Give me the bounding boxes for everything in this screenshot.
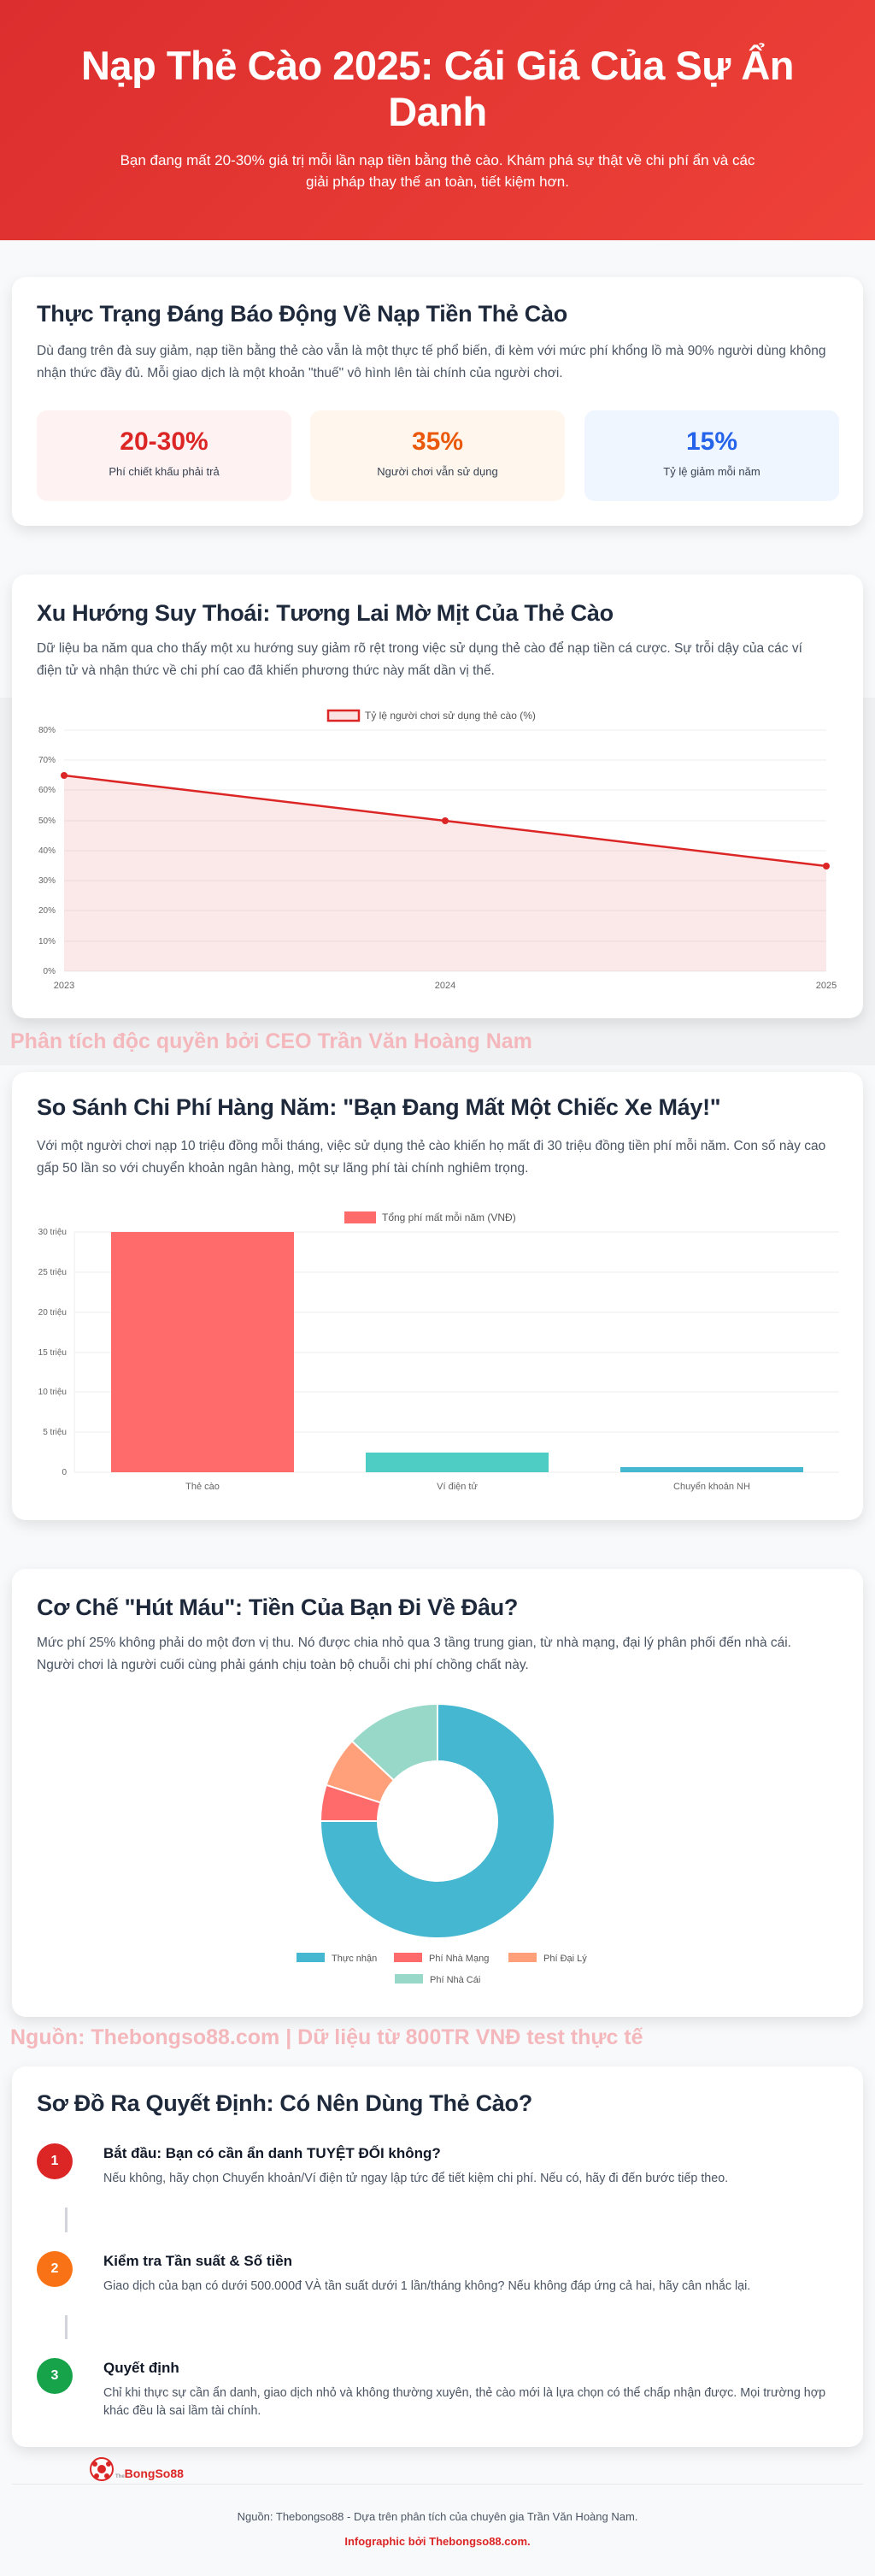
text block: Dù đang trên đà suy giảm, nạp tiền bằng thẻ cào vẫn là một thực tế phổ biến, đi kèm với mức phí khổng lồ mà 90% người dùng không nhận thức đầy đủ. Mỗi giao dịch là một khoản "thuế" vô hình lên tài chính của người chơi. <box>37 344 825 380</box>
panel: trend <box>12 575 863 1018</box>
line chart: 2024 <box>435 981 455 991</box>
heading: Sơ Đồ Ra Quyết Định: Có Nên Dùng Thẻ Cào? <box>37 2090 532 2116</box>
stat: users: Người chơi vẫn sử dụng <box>377 465 498 478</box>
line chart: 70% <box>38 756 56 765</box>
watermark: Phân tích độc quyền bởi CEO Trần Văn Hoàng Nam <box>10 1029 532 1053</box>
stat: users <box>310 410 565 501</box>
bar chart: Ví điện tử <box>437 1482 478 1492</box>
heading: So Sánh Chi Phí Hàng Năm: "Bạn Đang Mất Một Chiếc Xe Máy!" <box>37 1094 720 1120</box>
line chart: 60% <box>38 786 56 795</box>
line chart: 40% <box>38 846 56 856</box>
bar chart: 30 triệu <box>38 1228 67 1237</box>
stat: users: 35% <box>412 427 463 456</box>
legend: Tổng phí mất mỗi năm (VNĐ) <box>382 1211 516 1223</box>
bar chart: 5 triệu <box>43 1428 67 1437</box>
subtitle: Bạn đang mất 20-30% giá trị mỗi lần nạp tiền bằng thẻ cào. Khám phá sự thật về chi phí ẩn và các giải pháp thay thế an toàn, tiết kiệm hơn. <box>120 152 755 190</box>
panel: current situation <box>12 277 863 526</box>
step 1 <box>37 2143 728 2185</box>
background band <box>0 698 875 1065</box>
step 3: Quyết định <box>103 2360 179 2376</box>
stat: fee: Phí chiết khấu phải trả <box>109 465 220 478</box>
panel: annual cost <box>12 1072 863 1520</box>
text block: Mức phí 25% không phải do một đơn vị thu. Nó được chia nhỏ qua 3 tầng trung gian, từ nhà mạng, đại lý phân phối đến nhà cái. Người chơi là người cuối cùng phải gánh chịu toàn bộ chuỗi chi phí chồng chất này. <box>37 1636 791 1672</box>
line chart: 50% <box>38 816 56 826</box>
line chart: 2025 <box>816 981 837 991</box>
line chart: 0% <box>44 967 56 976</box>
step 2: 2 <box>51 2261 58 2276</box>
bar chart <box>38 1211 839 1492</box>
legend: Thực nhận <box>332 1954 377 1964</box>
step 1: Nếu không, hãy chọn Chuyển khoản/Ví điện tử ngay lập tức để tiết kiệm chi phí. Nếu có, hãy đi đến bước tiếp theo. <box>103 2172 728 2185</box>
bar chart: Chuyển khoản NH <box>673 1482 750 1492</box>
step 3: Chỉ khi thực sự cần ẩn danh, giao dịch nhỏ và không thường xuyên, thẻ cào mới là lựa chọn có thể chấp nhận được. Mọi trường hợp khác đều là sai lầm tài chính. <box>103 2386 825 2418</box>
logo: TheBongSo88 <box>115 2467 184 2480</box>
text block: Dữ liệu ba năm qua cho thấy một xu hướng suy giảm rõ rệt trong việc sử dụng thẻ cào để nạp tiền cá cược. Sự trỗi dậy của các ví điện tử và nhận thức về chi phí cao đã khiến phương thức này mất dần vị thế. <box>37 641 802 678</box>
bar chart: 20 triệu <box>38 1308 67 1317</box>
line chart: 30% <box>38 876 56 886</box>
bar chart: Thẻ cào <box>185 1482 220 1492</box>
step 2: Kiểm tra Tần suất & Số tiền <box>103 2253 292 2269</box>
legend: Phí Đại Lý <box>543 1954 587 1964</box>
bar chart: 15 triệu <box>38 1348 67 1358</box>
logo <box>90 2457 184 2481</box>
line chart: 80% <box>38 726 56 735</box>
footer credit: Infographic bởi Thebongso88.com. <box>344 2535 531 2548</box>
stat: decline <box>584 410 839 501</box>
stat: decline: Tỷ lệ giảm mỗi năm <box>663 465 760 478</box>
title: Nạp Thẻ Cào 2025: Cái Giá Của Sự Ẩn Danh <box>81 43 794 134</box>
stat: fee <box>37 410 291 501</box>
stat: fee: 20-30% <box>120 427 208 456</box>
panel: fee mechanism <box>12 1569 863 2017</box>
legend <box>297 1953 587 1985</box>
header banner <box>0 0 875 240</box>
heading: Cơ Chế "Hút Máu": Tiền Của Bạn Đi Về Đâu? <box>37 1595 518 1620</box>
line chart <box>38 710 837 991</box>
legend: Tỷ lệ người chơi sử dụng thẻ cào (%) <box>365 710 536 722</box>
panel: decision flow <box>12 2066 863 2447</box>
donut chart <box>297 1705 587 1985</box>
step 1: Bắt đầu: Bạn có cần ẩn danh TUYỆT ĐỐI không? <box>103 2145 441 2161</box>
bar chart: 10 triệu <box>38 1388 67 1397</box>
bar chart: 25 triệu <box>38 1268 67 1277</box>
line chart: 2023 <box>54 981 74 991</box>
legend: Phí Nhà Cái <box>430 1975 480 1985</box>
watermark: Nguồn: Thebongso88.com | Dữ liệu từ 800TR VNĐ test thực tế <box>10 2025 643 2049</box>
line chart: 20% <box>38 906 56 916</box>
step 3: 3 <box>51 2368 58 2383</box>
footer: Nguồn: Thebongso88 - Dựa trên phân tích của chuyên gia Trần Văn Hoàng Nam. <box>238 2510 637 2523</box>
stat: decline: 15% <box>686 427 737 456</box>
step 2: Giao dịch của bạn có dưới 500.000đ VÀ tần suất dưới 1 lần/tháng không? Nếu không đáp ứng cả hai, hãy cân nhắc lại. <box>103 2279 750 2293</box>
line chart: 10% <box>38 937 56 946</box>
heading: Xu Hướng Suy Thoái: Tương Lai Mờ Mịt Của Thẻ Cào <box>37 600 614 626</box>
step 2 <box>37 2251 750 2293</box>
bar chart: 0 <box>62 1468 67 1477</box>
step 1: 1 <box>51 2154 58 2168</box>
step 3 <box>37 2358 825 2418</box>
legend: Phí Nhà Mạng <box>429 1954 489 1964</box>
text block: Với một người chơi nạp 10 triệu đồng mỗi tháng, việc sử dụng thẻ cào khiến họ mất đi 30 triệu đồng tiền phí mỗi năm. Con số này cao gấp 50 lần so với chuyển khoản ngân hàng, một sự lãng phí tài chính nghiêm trọng. <box>37 1139 825 1176</box>
heading: Thực Trạng Đáng Báo Động Về Nạp Tiền Thẻ Cào <box>37 301 567 327</box>
